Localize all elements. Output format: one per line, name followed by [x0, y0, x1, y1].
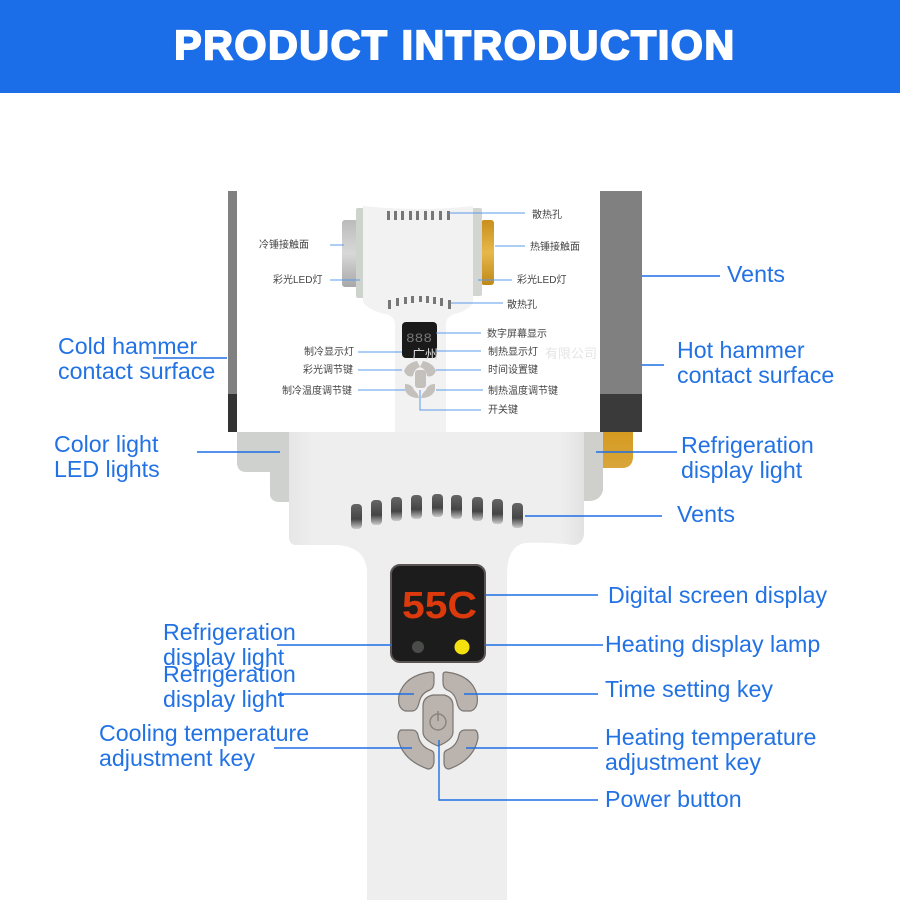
callout labels: Time setting key	[605, 676, 773, 702]
callout labels: display light	[163, 644, 285, 670]
callout labels: Refrigeration	[163, 619, 296, 645]
callout labels: Refrigeration	[681, 432, 814, 458]
callout labels: contact surface	[58, 358, 215, 384]
hot hammer right parts	[580, 432, 633, 501]
callout labels: LED lights	[54, 456, 160, 482]
device body	[289, 432, 584, 900]
callout labels: Vents	[677, 501, 735, 527]
callout labels: adjustment key	[605, 749, 761, 775]
right grey strip	[600, 191, 642, 394]
title: PRODUCT INTRODUCTION	[174, 22, 736, 68]
callout labels: Cold hammer	[58, 333, 197, 359]
key: time setting	[443, 672, 477, 711]
callout labels: display light	[163, 686, 285, 712]
callout labels: display light	[681, 457, 803, 483]
inset labels: 彩光LED灯	[517, 273, 566, 286]
inset device	[342, 206, 494, 432]
inset labels: 制冷温度调节键	[282, 384, 352, 397]
callout labels: contact surface	[677, 362, 834, 388]
large device	[237, 432, 633, 900]
inset image panel	[227, 191, 642, 432]
key: power	[423, 695, 453, 746]
inset labels: 彩光调节键	[303, 363, 353, 376]
heating indicator lamp	[454, 640, 470, 654]
cooling indicator lamp	[412, 641, 424, 653]
inset labels: 时间设置键	[488, 363, 538, 376]
callout labels: Refrigeration	[163, 661, 296, 687]
inset labels: 散热孔	[507, 298, 537, 311]
callout labels: Hot hammer	[677, 337, 805, 363]
inset labels: 彩光LED灯	[273, 273, 322, 286]
key: heating	[444, 730, 478, 769]
cold hammer left ring	[237, 432, 292, 502]
power glyph	[430, 711, 446, 730]
leader lines	[153, 276, 720, 800]
callout labels: Color light	[54, 431, 159, 457]
inset image panel: 有限公司	[545, 346, 597, 361]
callout labels: Vents	[727, 261, 785, 287]
callout labels: adjustment key	[99, 745, 255, 771]
inset labels: 制热温度调节键	[488, 384, 558, 397]
temperature readout: 55C	[402, 585, 477, 627]
header banner	[0, 0, 900, 93]
control keys	[398, 672, 478, 769]
inset labels	[259, 208, 580, 416]
inset labels: 制热显示灯	[488, 345, 538, 358]
callout labels: Heating temperature	[605, 724, 816, 750]
callout labels: Heating display lamp	[605, 631, 820, 657]
callout labels: Power button	[605, 786, 742, 812]
digital screen	[391, 565, 485, 662]
inset labels: 散热孔	[532, 208, 562, 221]
inset device: 888	[406, 331, 432, 346]
inset labels: 制冷显示灯	[304, 345, 354, 358]
inset labels: 开关键	[488, 403, 518, 416]
inset watermark: 广州	[412, 347, 438, 362]
left grey strip	[228, 191, 237, 394]
inset labels: 冷锤接触面	[259, 238, 309, 251]
inset labels: 热锤接触面	[530, 240, 580, 253]
inset leader lines	[330, 213, 525, 410]
key: cooling	[398, 730, 434, 769]
callout labels	[54, 261, 834, 812]
key: color light	[399, 672, 434, 711]
callout labels: Digital screen display	[608, 582, 827, 608]
inset labels: 数字屏幕显示	[487, 327, 547, 340]
vents	[351, 494, 523, 529]
callout labels: Cooling temperature	[99, 720, 309, 746]
